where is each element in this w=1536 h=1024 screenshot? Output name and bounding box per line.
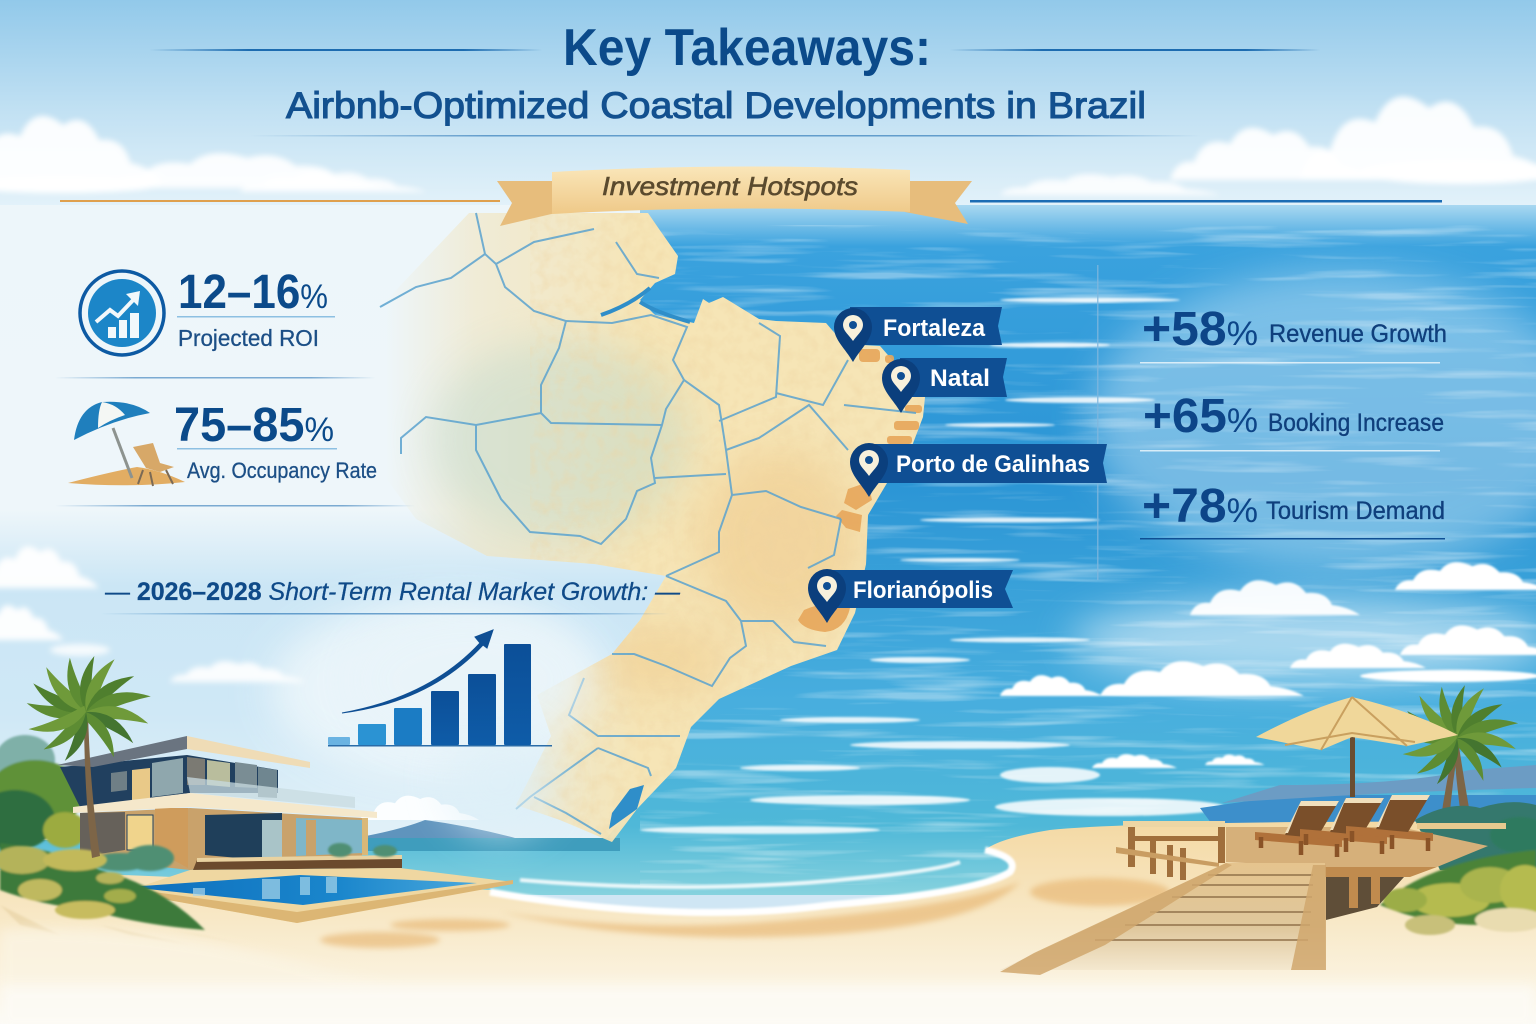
roof	[57, 736, 310, 768]
icon: ROI chart badge	[80, 271, 164, 355]
map fade near chart	[350, 610, 590, 750]
map fade south-west	[445, 725, 555, 835]
lower right cloud haze	[1070, 598, 1536, 682]
far water right	[1200, 795, 1536, 835]
land colouring	[430, 210, 930, 850]
far cloud left	[360, 796, 479, 820]
pin: Fortaleza: Fortaleza	[883, 315, 986, 342]
deck fascia	[1325, 867, 1437, 877]
sand dune shadows	[0, 905, 250, 945]
title	[150, 19, 1320, 126]
pin: Porto de Galinhas: Porto de Galinhas	[896, 451, 1090, 478]
tourism label: Tourism Demand	[1266, 497, 1445, 525]
foreground bushes left	[0, 843, 205, 930]
ribbon tails	[497, 181, 972, 226]
revenue label: Revenue Growth	[1269, 320, 1447, 348]
right divider 1	[1140, 362, 1440, 364]
pin: Porto de Galinhas	[850, 443, 1107, 497]
upper wall	[60, 755, 278, 807]
dune bright	[0, 929, 420, 1000]
market growth heading: — 2026–2028 Short-Term Rental Market Growth: —	[105, 578, 681, 606]
pin: Florianópolis	[808, 569, 1013, 623]
boardwalk side beams	[1000, 863, 1326, 975]
bar chart	[328, 630, 552, 746]
pool rim	[140, 880, 513, 923]
wood cladding	[155, 808, 188, 868]
far sea left	[360, 838, 620, 851]
booking label: Booking Increase	[1268, 409, 1444, 437]
state borders	[380, 213, 916, 834]
pale right-hand sea wash	[1090, 270, 1536, 570]
booking value: +65%	[1143, 390, 1258, 443]
deck platform	[1226, 827, 1488, 867]
ocean streak texture	[640, 225, 1536, 885]
ROI label: Projected ROI	[178, 325, 319, 351]
pin: Fortaleza	[834, 307, 1002, 362]
subtitle rule	[250, 135, 1200, 136]
villa shrubs	[92, 843, 397, 871]
sea foam and wave streaks	[640, 298, 1225, 834]
stat: booking increase	[1143, 390, 1444, 443]
slab	[73, 793, 377, 818]
column	[362, 818, 368, 855]
right divider 2	[1140, 450, 1440, 452]
ribbon: Investment Hotspots	[60, 166, 1442, 226]
divider right	[970, 200, 1442, 202]
pale left panel and lower left sky wash	[0, 205, 700, 840]
lower wall	[80, 808, 362, 870]
bottom fade	[0, 985, 1536, 1024]
tourism value: +78%	[1142, 480, 1258, 533]
occupancy label: Avg. Occupancy Rate	[187, 458, 377, 483]
loungers	[1255, 795, 1433, 857]
left palm	[25, 654, 153, 858]
deck posts	[1349, 877, 1380, 908]
grey lower wall	[80, 812, 125, 857]
map of Brazil	[380, 210, 930, 850]
ROI value: 12–16%	[178, 266, 328, 319]
villa	[57, 736, 402, 870]
pool reflections	[193, 877, 337, 899]
right palm	[1399, 684, 1520, 825]
stat: tourism demand	[1142, 480, 1445, 533]
title rules	[150, 49, 1320, 51]
wall pillar	[306, 820, 316, 856]
railing	[1116, 821, 1225, 880]
divider left	[60, 200, 500, 202]
boardwalk	[1000, 863, 1325, 970]
pin: Natal: Natal	[930, 365, 990, 392]
distant hills right	[1222, 765, 1536, 803]
beach umbrella	[1256, 697, 1458, 797]
left tree mass	[0, 735, 87, 850]
upper windows	[111, 757, 277, 802]
stat divider lower	[55, 505, 415, 506]
stat: occupancy	[68, 399, 377, 486]
glass pane	[262, 820, 282, 862]
terrace base	[193, 857, 402, 870]
lagoon	[609, 785, 644, 829]
occupancy value: 75–85%	[174, 399, 334, 452]
ribbon text: Investment Hotspots	[602, 171, 858, 201]
right divider 3	[1140, 538, 1445, 540]
rear bench	[1417, 823, 1506, 829]
icon: beach umbrella and chair	[68, 402, 185, 486]
deck underside	[1326, 877, 1404, 920]
sea view opening	[296, 818, 362, 856]
Amazon river mouth	[601, 288, 690, 322]
subtitle: Airbnb-Optimized Coastal Developments in Brazil	[286, 85, 1146, 126]
land mass	[380, 213, 925, 842]
main heading: Key Takeaways:	[563, 19, 931, 77]
market heading rule	[100, 613, 670, 614]
ocean	[0, 205, 1536, 895]
sky clouds	[0, 96, 1536, 195]
right panel divider	[1097, 265, 1098, 580]
pin: Natal	[882, 358, 1007, 413]
ribbon body	[552, 166, 910, 214]
balcony glass	[187, 777, 355, 808]
wet sand patches	[320, 878, 1170, 948]
orange coastal patches	[798, 349, 922, 632]
pale chart glow	[270, 600, 610, 780]
growth arrow	[342, 630, 493, 713]
lower right clouds	[1000, 562, 1536, 768]
lower glass	[205, 813, 282, 862]
sky background	[0, 0, 1536, 225]
beach sand	[0, 822, 1536, 1024]
lower left clouds	[0, 546, 306, 682]
pool water	[128, 875, 477, 905]
stat: projected ROI	[80, 266, 335, 355]
right foliage	[1380, 817, 1536, 935]
back treeline	[1415, 802, 1536, 870]
pin: Florianópolis: Florianópolis	[853, 577, 993, 604]
yellow window	[127, 815, 153, 850]
far hill left	[355, 820, 515, 838]
pool deck	[130, 868, 513, 923]
stat: revenue growth	[1142, 303, 1447, 356]
occupancy value rule	[177, 448, 337, 450]
revenue value: +58%	[1142, 303, 1258, 356]
stat divider	[55, 377, 375, 378]
boardwalk planks	[1095, 875, 1313, 940]
terrace top	[197, 855, 402, 862]
shoreline foam	[490, 850, 1012, 913]
ROI value rule	[177, 316, 335, 318]
